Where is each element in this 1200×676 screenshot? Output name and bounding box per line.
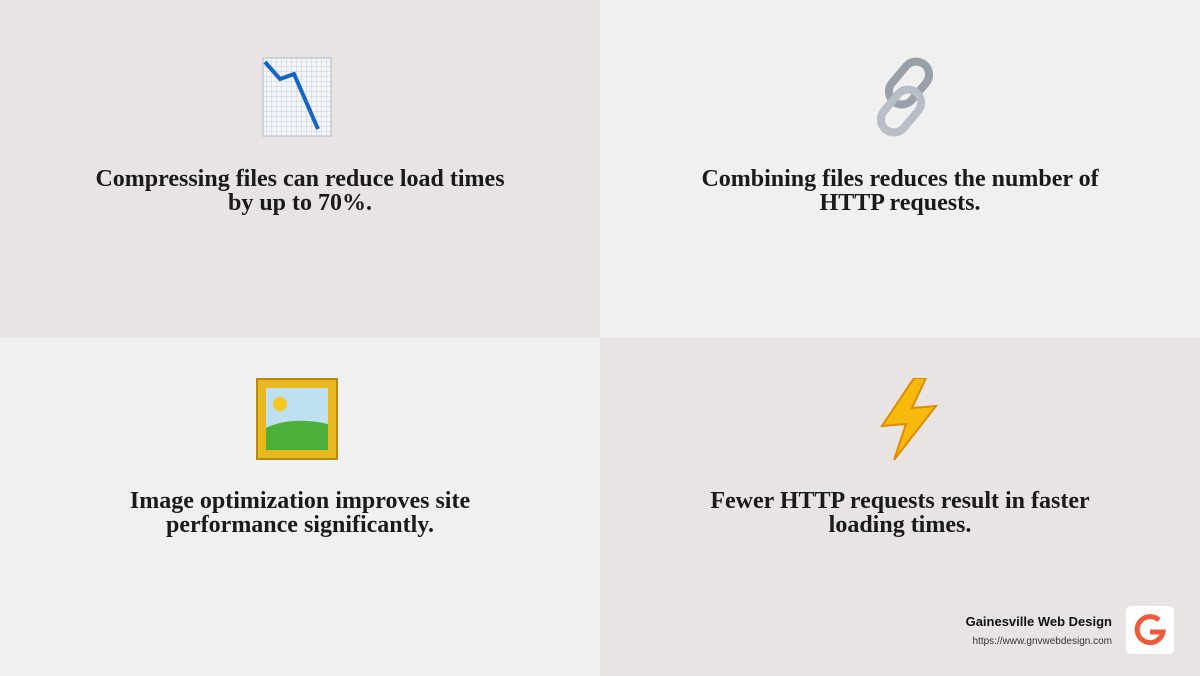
text: image optimization: Image optimization improves site xyxy=(130,488,470,514)
text: combining: HTTP requests. xyxy=(820,190,980,216)
text: fewer requests: loading times. xyxy=(829,512,971,538)
text: image optimization xyxy=(130,488,470,538)
brand block xyxy=(966,606,1174,654)
brand name: Gainesville Web Design xyxy=(966,614,1112,629)
text: combining: Combining files reduces the number of xyxy=(701,166,1099,192)
icon: lightning xyxy=(880,378,938,460)
icon: framed picture xyxy=(256,378,338,460)
panel: image optimization xyxy=(0,338,600,676)
text: combining xyxy=(701,166,1099,216)
text: image optimization: performance significantly. xyxy=(166,512,434,538)
text: compression xyxy=(95,166,505,216)
text: compression: Compressing files can reduce load times xyxy=(95,166,505,192)
logo xyxy=(1126,606,1174,654)
icon: chart decreasing xyxy=(262,58,332,136)
text: compression: by up to 70%. xyxy=(228,190,372,216)
text: fewer requests: Fewer HTTP requests result in faster xyxy=(710,488,1090,514)
panel: combining xyxy=(600,0,1200,338)
panel: fewer requests xyxy=(600,338,1200,676)
text: fewer requests xyxy=(710,488,1090,538)
icon: chain link xyxy=(877,58,934,136)
panel: compression xyxy=(0,0,600,338)
brand url: https://www.gnvwebdesign.com xyxy=(972,636,1112,647)
